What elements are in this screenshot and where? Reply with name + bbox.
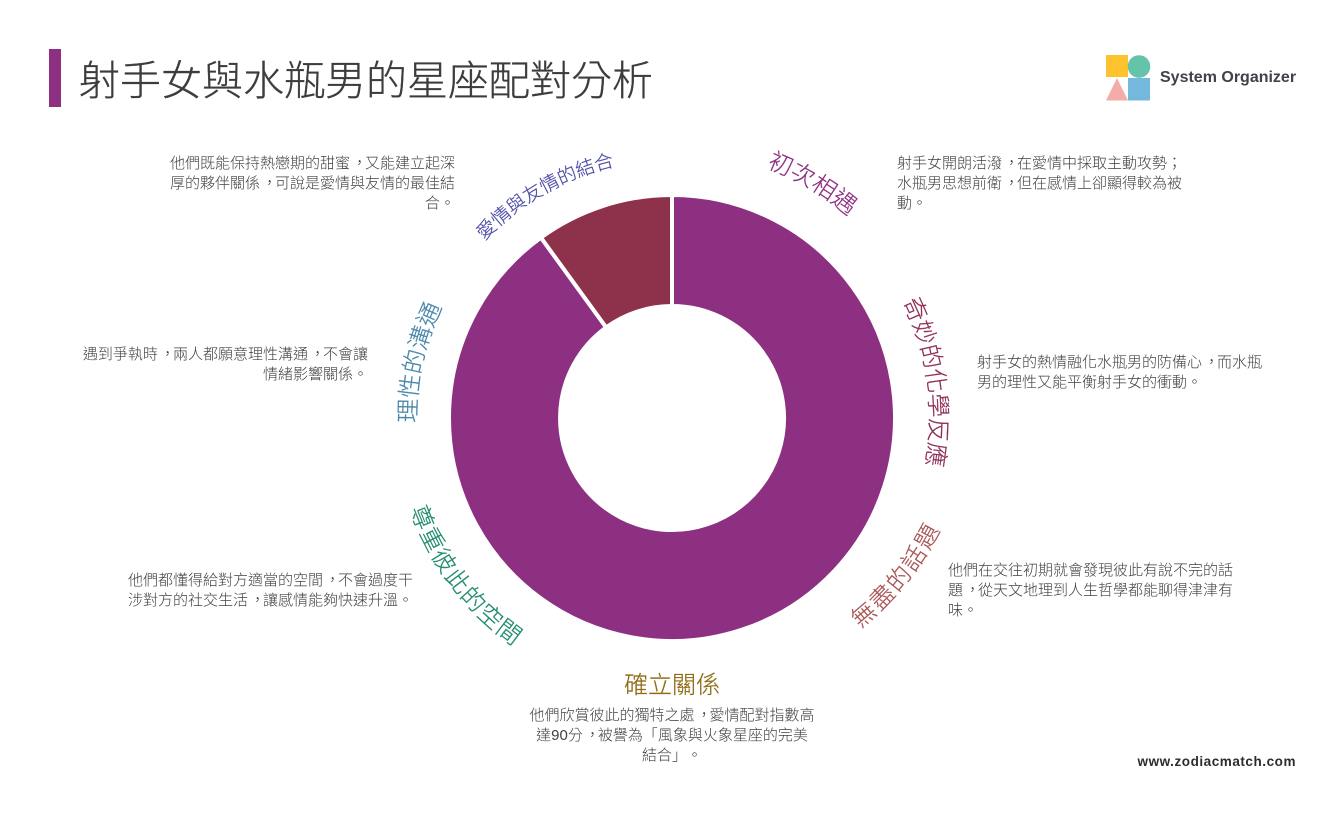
label: 確立關係: 確立關係	[624, 672, 720, 699]
text: 確立關係: 達90分，被譽為「風象與火象星座的完美	[536, 727, 808, 744]
text: 確立關係: 他們欣賞彼此的獨特之處，愛情配對指數高	[529, 707, 815, 724]
text: 初次相遇: 射手女開朗活潑，在愛情中採取主動攻勢；	[897, 155, 1182, 172]
text: 初次相遇: 動。	[897, 195, 927, 212]
text: 確立關係: 結合」。	[642, 747, 702, 764]
text: 確立關係	[529, 707, 815, 764]
text: 無盡的話題: 味。	[948, 602, 978, 619]
donut chart	[449, 195, 895, 641]
text: 愛情與友情的結合: 他們既能保持熱戀期的甜蜜，又能建立起深	[170, 155, 455, 172]
text: 理性的溝通: 遇到爭執時，兩人都願意理性溝通，不會讓	[83, 346, 368, 363]
text: 理性的溝通	[83, 346, 368, 383]
text: 無盡的話題: 題，從天文地理到人生哲學都能聊得津津有	[948, 582, 1233, 599]
label: 初次相遇: 初次相遇	[770, 150, 858, 216]
text: 尊重彼此的空間	[128, 572, 413, 609]
text: 愛情與友情的結合: 合。	[425, 195, 455, 212]
label: 理性的溝通: 理性的溝通	[397, 301, 442, 422]
slice: 10%	[541, 195, 672, 327]
text: 初次相遇	[897, 155, 1182, 212]
text: 無盡的話題: 他們在交往初期就會發現彼此有說不完的話	[948, 562, 1233, 579]
text: 初次相遇: 水瓶男思想前衛，但在感情上卻顯得較為被	[897, 174, 1182, 192]
label: 愛情與友情的結合: 愛情與友情的結合	[476, 153, 612, 240]
label: 尊重彼此的空間: 尊重彼此的空間	[412, 504, 524, 646]
text: 奇妙的化學反應	[977, 354, 1262, 391]
title accent bar	[49, 49, 61, 107]
text: 無盡的話題	[948, 562, 1233, 619]
text: 尊重彼此的空間: 涉對方的社交生活，讓感情能夠快速升溫。	[128, 591, 413, 609]
text: 理性的溝通: 情緒影響關係。	[263, 365, 368, 383]
logo: System Organizer	[1106, 55, 1296, 100]
text: 愛情與友情的結合: 厚的夥伴關係，可說是愛情與友情的最佳結	[170, 174, 455, 192]
label: 奇妙的化學反應: 奇妙的化學反應	[904, 296, 950, 467]
text: 愛情與友情的結合	[170, 155, 455, 212]
logo: System Organizer: System Organizer	[1160, 69, 1296, 86]
text: 奇妙的化學反應: 射手女的熱情融化水瓶男的防備心，而水瓶	[977, 354, 1262, 371]
label: 無盡的話題: 無盡的話題	[852, 522, 941, 628]
text: 尊重彼此的空間: 他們都懂得給對方適當的空間，不會過度干	[128, 572, 413, 589]
slice: 90%	[449, 195, 895, 641]
title: 射手女與水瓶男的星座配對分析	[79, 58, 653, 104]
text: 奇妙的化學反應: 男的理性又能平衡射手女的衝動。	[977, 374, 1202, 391]
footer url: www.zodiacmatch.com	[1137, 754, 1296, 769]
